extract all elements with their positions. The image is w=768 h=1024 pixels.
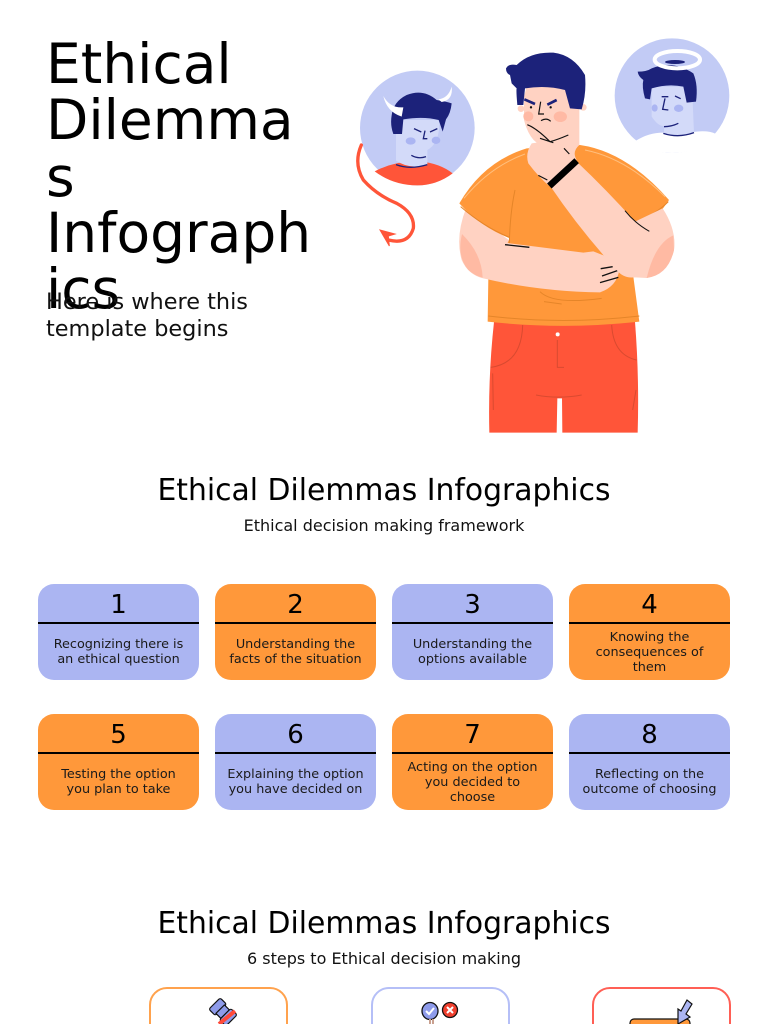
figure: man right arm — [551, 162, 674, 278]
title — [46, 32, 311, 321]
icon card: check and cross choice — [371, 987, 510, 1024]
step card 1: Recognizing there is — [54, 637, 183, 652]
title: Dilemma — [46, 88, 294, 152]
icon: devil tail — [358, 145, 413, 246]
step card 3: options available — [418, 652, 527, 667]
icon card: gavel — [149, 987, 288, 1024]
figure: man head — [506, 53, 587, 187]
title: s — [46, 145, 75, 209]
step card 1 — [38, 584, 199, 680]
step card 5: you plan to take — [67, 782, 170, 797]
figure: man left arm — [460, 234, 619, 292]
heading: framework: Ethical Dilemmas Infographics — [157, 473, 610, 508]
title: Infograph — [46, 201, 311, 265]
step card 6: you have decided on — [229, 782, 362, 797]
step card 6: Explaining the option — [227, 767, 364, 782]
figure: man upper arms — [459, 207, 674, 278]
heading: six steps: Ethical Dilemmas Infographics — [157, 906, 610, 941]
title: Ethical — [46, 32, 232, 96]
step card 3: 3 — [464, 590, 481, 620]
icon: angel avatar — [615, 38, 729, 153]
step card 6: 6 — [287, 720, 304, 750]
step card 2: facts of the situation — [229, 652, 362, 667]
step card 8: Reflecting on the — [595, 767, 704, 782]
step card 1: 1 — [110, 590, 127, 620]
step card 2 — [215, 584, 376, 680]
title: ics — [46, 257, 120, 321]
step card 3 — [392, 584, 553, 680]
step card 4: them — [633, 660, 666, 674]
step card 4: 4 — [641, 590, 658, 620]
figure: man shirt — [459, 145, 669, 326]
step card 7: Acting on the option — [408, 760, 537, 774]
step card 8 — [569, 714, 730, 810]
step card 7 — [392, 714, 553, 810]
step card 3: Understanding the — [413, 637, 532, 652]
subheading: framework: Ethical decision making framework — [244, 516, 524, 535]
icon: devil avatar — [360, 71, 475, 185]
step card 1: an ethical question — [57, 652, 180, 667]
step card 8: outcome of choosing — [583, 782, 716, 797]
step card 2: 2 — [287, 590, 304, 620]
step card 5 — [38, 714, 199, 810]
icon card: arrow pointing at folder — [592, 987, 731, 1024]
step card 2: Understanding the — [236, 637, 355, 652]
subheading: six steps: 6 steps to Ethical decision making — [247, 949, 521, 968]
step card 4 — [569, 584, 730, 680]
step card 5: Testing the option — [61, 767, 176, 782]
step card 7: 7 — [464, 720, 481, 750]
subtitle: template begins — [46, 316, 228, 342]
illustration: thinking man with devil and angel — [356, 38, 730, 433]
step card 7: you decided to — [425, 774, 520, 790]
step card 7: choose — [450, 790, 495, 804]
subtitle: Here is where this — [46, 289, 248, 315]
figure: man pants — [489, 322, 638, 433]
step card 4: consequences of — [596, 644, 703, 660]
step card 4: Knowing the — [610, 630, 689, 644]
step card 8: 8 — [641, 720, 658, 750]
subtitle — [46, 289, 248, 342]
step card 6 — [215, 714, 376, 810]
step card 5: 5 — [110, 720, 127, 750]
